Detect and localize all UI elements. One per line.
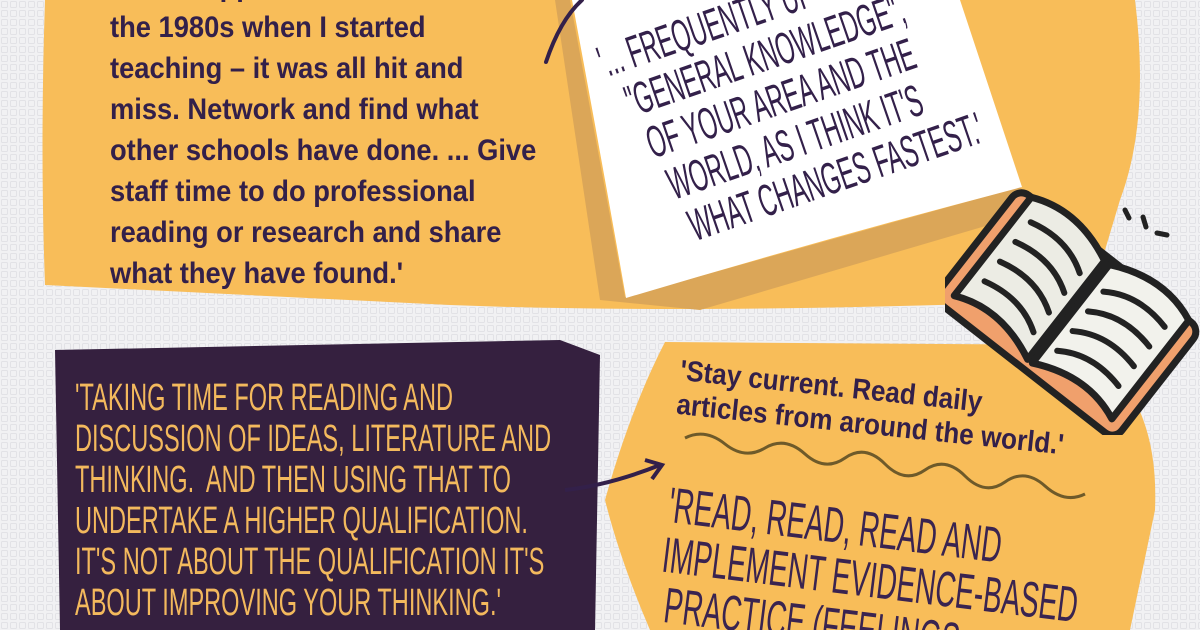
text block: purple quote: UNDERTAKE A HIGHER QUALIFICATION. [75, 500, 528, 542]
text block: purple quote: 'TAKING TIME FOR READING AND [75, 377, 453, 419]
panel: bottom right orange blob [605, 342, 1156, 630]
text block: paper quote: OF YOUR AREA AND THE [639, 28, 922, 168]
text block: top left quote: other schools have done. ... Give [110, 134, 536, 167]
text block: top left quote: what they have found.' [110, 257, 403, 290]
text block: stay current quote [675, 355, 1065, 461]
text block: top left quote: staff time to do professional [110, 175, 476, 208]
text block: stay current quote: 'Stay current. Read daily [679, 355, 984, 419]
text block: top left quote: teaching – it was all hit and [110, 52, 463, 85]
text block: read read read quote [659, 477, 1081, 630]
text block: read read read quote: IMPLEMENT EVIDENCE-BASED [659, 527, 1081, 630]
text block: purple quote: THINKING. AND THEN USING THAT TO [75, 459, 511, 501]
text block: purple quote: DISCUSSION OF IDEAS, LITERATURE AND [75, 418, 551, 460]
arrow: purple to orange [565, 458, 666, 492]
text block: purple quote: IT'S NOT ABOUT THE QUALIFICATION IT'S [75, 541, 544, 583]
text block: purple quote: ABOUT IMPROVING YOUR THINKING.' [75, 582, 501, 624]
text block: top left quote [110, 0, 536, 290]
divider: wavy line [684, 432, 1086, 500]
text block: read read read quote: 'READ, READ, READ AND [666, 477, 1005, 573]
icon: open book [945, 189, 1200, 435]
text block: paper quote [591, 0, 989, 251]
text block: top left quote: miss. Network and find what [110, 93, 479, 126]
text block: purple quote [75, 377, 551, 624]
text block: stay current quote: articles from around the world.' [675, 389, 1065, 461]
text block: top left quote: the 1980s when I started [110, 11, 426, 44]
panel: top orange note [42, 0, 1140, 310]
text block: paper quote: WHAT CHANGES FASTEST.' [682, 102, 989, 251]
arrow: top curve [544, 0, 584, 64]
panel: white paper note [572, 0, 1022, 298]
text block: paper quote: WORLD, AS I THINK IT'S [661, 74, 929, 209]
text block: top left quote: reading or research and share [110, 216, 501, 249]
panel: bottom left purple box [55, 340, 600, 630]
